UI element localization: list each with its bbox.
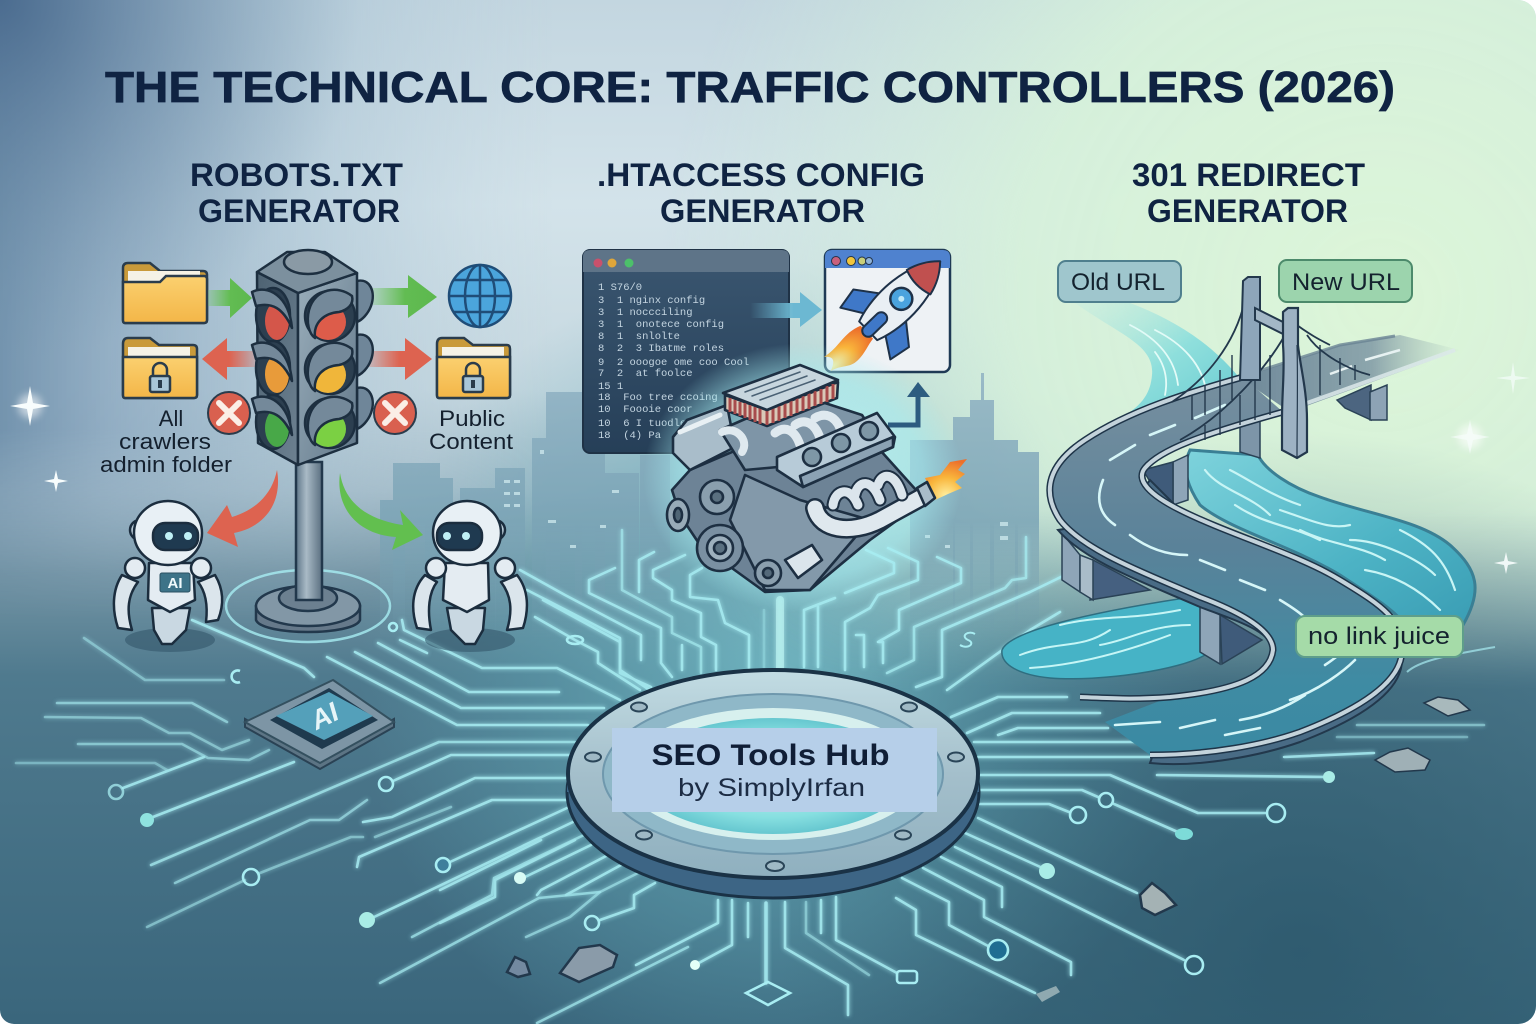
- far road span: [1240, 335, 1460, 412]
- code lines: 3 1 noccciling: [598, 307, 693, 319]
- label: no link juice: [1296, 616, 1463, 657]
- back tower: [1240, 277, 1260, 380]
- heading: htaccess config generator: .HTACCESS CONFIG: [597, 157, 925, 193]
- label: all crawlers admin folder: crawlers: [119, 429, 211, 454]
- rocks: [507, 697, 1470, 982]
- cables: [1172, 300, 1370, 440]
- label: public content: [429, 406, 513, 454]
- label: all crawlers admin folder: All: [159, 406, 183, 431]
- rail: inner: [1050, 377, 1273, 699]
- water channel: main: [1186, 450, 1475, 625]
- engine glow: [643, 343, 963, 613]
- front tower: [1282, 308, 1307, 458]
- right face lamps: [305, 291, 355, 341]
- pulleys: [700, 480, 734, 514]
- arrow: blocked right: [367, 338, 432, 380]
- label: public content: Public: [439, 406, 505, 431]
- label: public content: Content: [429, 429, 513, 454]
- curved green arrow: [339, 473, 423, 550]
- code lines: [598, 282, 749, 442]
- hub label: [612, 728, 937, 812]
- suspension bridge: [1172, 277, 1370, 458]
- heading: htaccess config generator: [597, 157, 925, 229]
- curved red arrow: [207, 470, 278, 547]
- left face lamps: [256, 288, 290, 342]
- folder: locked right: [437, 338, 510, 398]
- label: Old URL: [1058, 261, 1181, 302]
- code lines: 15 1: [598, 381, 623, 393]
- folder: open: [123, 263, 207, 323]
- robot: AI crawler left: [114, 501, 222, 652]
- road flow lines: [1099, 405, 1355, 735]
- code lines: 10 6 I tuodle: [598, 418, 686, 430]
- code lines: 18 Foo tree ccoing: [598, 392, 718, 404]
- label: New URL: New URL: [1292, 269, 1400, 296]
- label: no link juice: no link juice: [1308, 623, 1450, 650]
- arrow: light to globe: [373, 275, 437, 318]
- icon: globe: [449, 265, 511, 327]
- bridge piers: [1062, 385, 1387, 664]
- heading: 301 redirect generator: GENERATOR: [1147, 193, 1348, 229]
- heading: robots.txt generator: [190, 157, 403, 229]
- heading: 301 redirect generator: [1132, 157, 1365, 229]
- icon: blocked X left: [208, 392, 250, 434]
- title: THE TECHNICAL CORE: TRAFFIC CONTROLLERS (2026): [105, 63, 1395, 112]
- exhaust manifold: [815, 497, 922, 529]
- water pool: [1002, 595, 1205, 679]
- central hub: [567, 670, 979, 898]
- heading: htaccess config generator: GENERATOR: [660, 193, 865, 229]
- cross beam: [1255, 308, 1283, 334]
- arrow: engine to browser: [888, 382, 930, 425]
- sparkles: [10, 362, 1530, 574]
- code lines: 18 (4) Pa: [598, 430, 661, 442]
- side visors: [357, 281, 373, 429]
- label: all crawlers admin folder: [100, 406, 232, 477]
- robot badge: AI: [168, 575, 182, 592]
- icon: blocked X right: [374, 392, 416, 434]
- code lines: 3 1 nginx config: [598, 295, 705, 307]
- folder: locked left: [123, 338, 197, 398]
- code lines: 3 1 onotece config: [598, 319, 724, 331]
- hub label: SEO Tools Hub: [652, 739, 890, 772]
- hub label: by SimplyIrfan: [678, 774, 865, 802]
- valve cover: [777, 413, 895, 487]
- icon: rocket: [801, 233, 968, 398]
- code lines: 9 2 ooogoe ome coo Cool: [598, 357, 749, 369]
- air filter: [723, 365, 838, 426]
- browser window with rocket: [801, 233, 968, 398]
- code lines: 10 Foooie coor: [598, 404, 693, 416]
- traffic light: [252, 250, 373, 465]
- traffic light base: [226, 462, 390, 642]
- circuit nodes: [109, 623, 1335, 1005]
- arrow: blocked left: [202, 338, 257, 380]
- city skyline: [380, 373, 1039, 643]
- AI chip: [245, 680, 394, 769]
- intake runners: [720, 395, 875, 470]
- engine: [667, 365, 967, 592]
- code editor window: [583, 250, 789, 453]
- engine block: [672, 440, 925, 592]
- heading: robots.txt generator: GENERATOR: [198, 193, 400, 229]
- chip label: AI: [308, 695, 341, 737]
- pole: [296, 462, 322, 600]
- robot: crawler right: [413, 501, 527, 652]
- code lines: 8 2 3 Ibatme roles: [598, 343, 724, 355]
- housing: [257, 272, 298, 465]
- water channel: upper: [1075, 303, 1245, 425]
- label: all crawlers admin folder: admin folder: [100, 452, 232, 477]
- exhaust flame: [925, 459, 967, 500]
- hub bolts: [585, 702, 964, 871]
- heading: 301 redirect generator: 301 REDIRECT: [1132, 157, 1365, 193]
- water tail under label: [1407, 647, 1495, 672]
- arrow: code to browser: [750, 292, 822, 327]
- heading: robots.txt generator: ROBOTS.TXT: [190, 157, 403, 193]
- arrow: folder allowed to light: [208, 278, 252, 318]
- rail: outer: [1142, 412, 1402, 755]
- code lines: 7 2 at foolce: [598, 368, 693, 380]
- label: New URL: [1279, 260, 1412, 302]
- circuit board traces: [16, 530, 1484, 1023]
- winding road: [1050, 377, 1402, 764]
- code lines: 1 S76/0: [598, 282, 642, 294]
- label: Old URL: Old URL: [1071, 269, 1165, 296]
- rear cover: [673, 405, 735, 470]
- code lines: 8 1 snlolte: [598, 331, 680, 343]
